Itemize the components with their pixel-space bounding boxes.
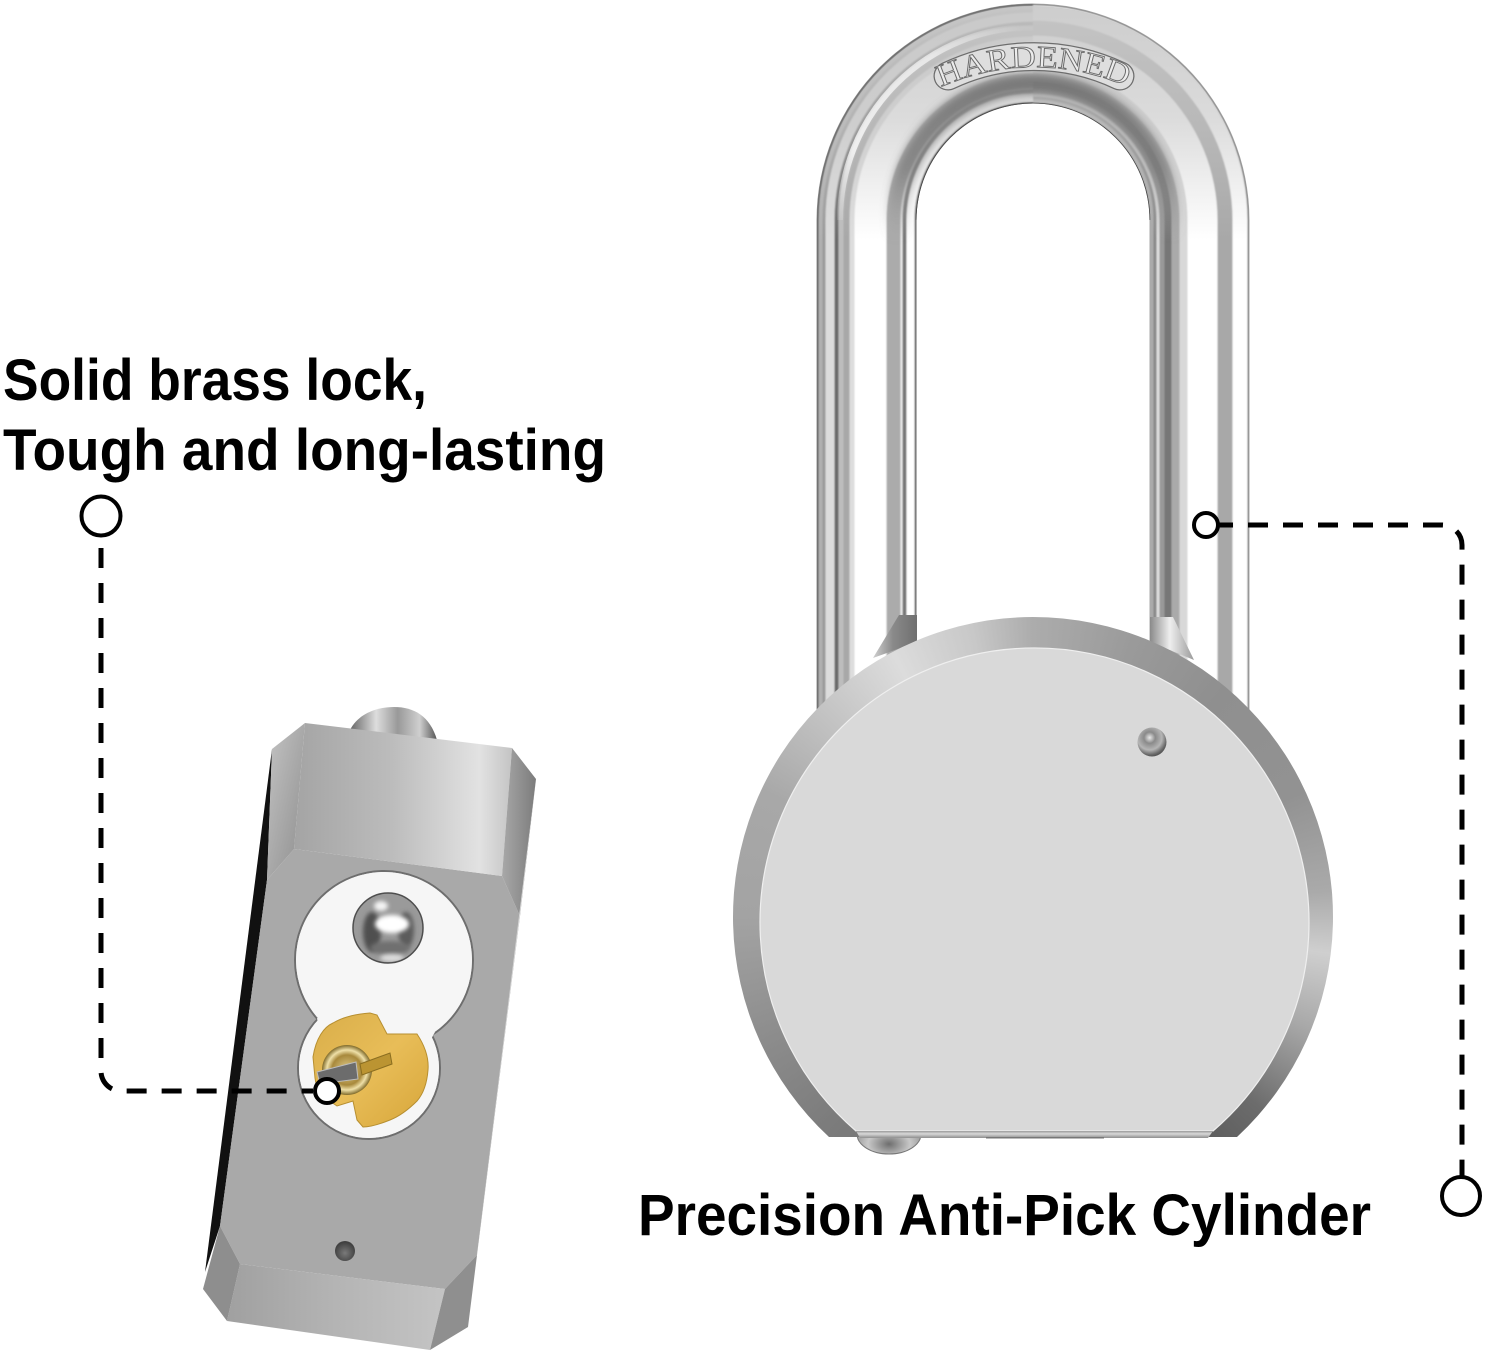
heading: solid brass lock (3, 348, 606, 483)
top-left bevel (267, 723, 305, 880)
top-right bevel (502, 748, 536, 916)
bottom ball bearing (857, 1114, 921, 1154)
brass cylinder (313, 1013, 428, 1127)
padlock body face (760, 648, 1309, 1138)
stamped label: HARDENED: HARDENED (934, 46, 1130, 87)
key slot blade (360, 1053, 392, 1075)
silver pin bar (317, 1062, 358, 1084)
callout line: left (82, 496, 339, 1103)
rivet pin (1138, 728, 1166, 756)
heading: precision cylinder: Precision Anti-Pick Cylinder (638, 1183, 1371, 1248)
right edge (468, 779, 536, 1327)
bottom edge strip (856, 1131, 1213, 1138)
lock body (203, 723, 536, 1350)
padlock underside view (203, 707, 536, 1350)
shackle (816, 4, 1250, 740)
padlock body rim (733, 617, 1333, 1137)
padlock front view (733, 4, 1333, 1154)
dark side edge (205, 749, 272, 1272)
callout line: right (1194, 513, 1480, 1215)
bottom band (227, 1264, 445, 1350)
shackle stub (350, 707, 437, 740)
bottom hole (335, 1241, 355, 1261)
heading: solid brass lock: Solid brass lock, (3, 348, 427, 413)
bottom-right bevel (430, 1255, 477, 1350)
ball bearing (353, 893, 423, 963)
keyway seam (986, 1137, 1104, 1138)
bottom-left bevel (203, 1226, 240, 1321)
front face (220, 849, 520, 1289)
figure-eight recess (295, 871, 473, 1139)
heading: solid brass lock: Tough and long-lasting (3, 418, 606, 483)
shackle base flares (873, 615, 1194, 660)
keyhole (322, 1045, 372, 1095)
top band (294, 723, 512, 876)
